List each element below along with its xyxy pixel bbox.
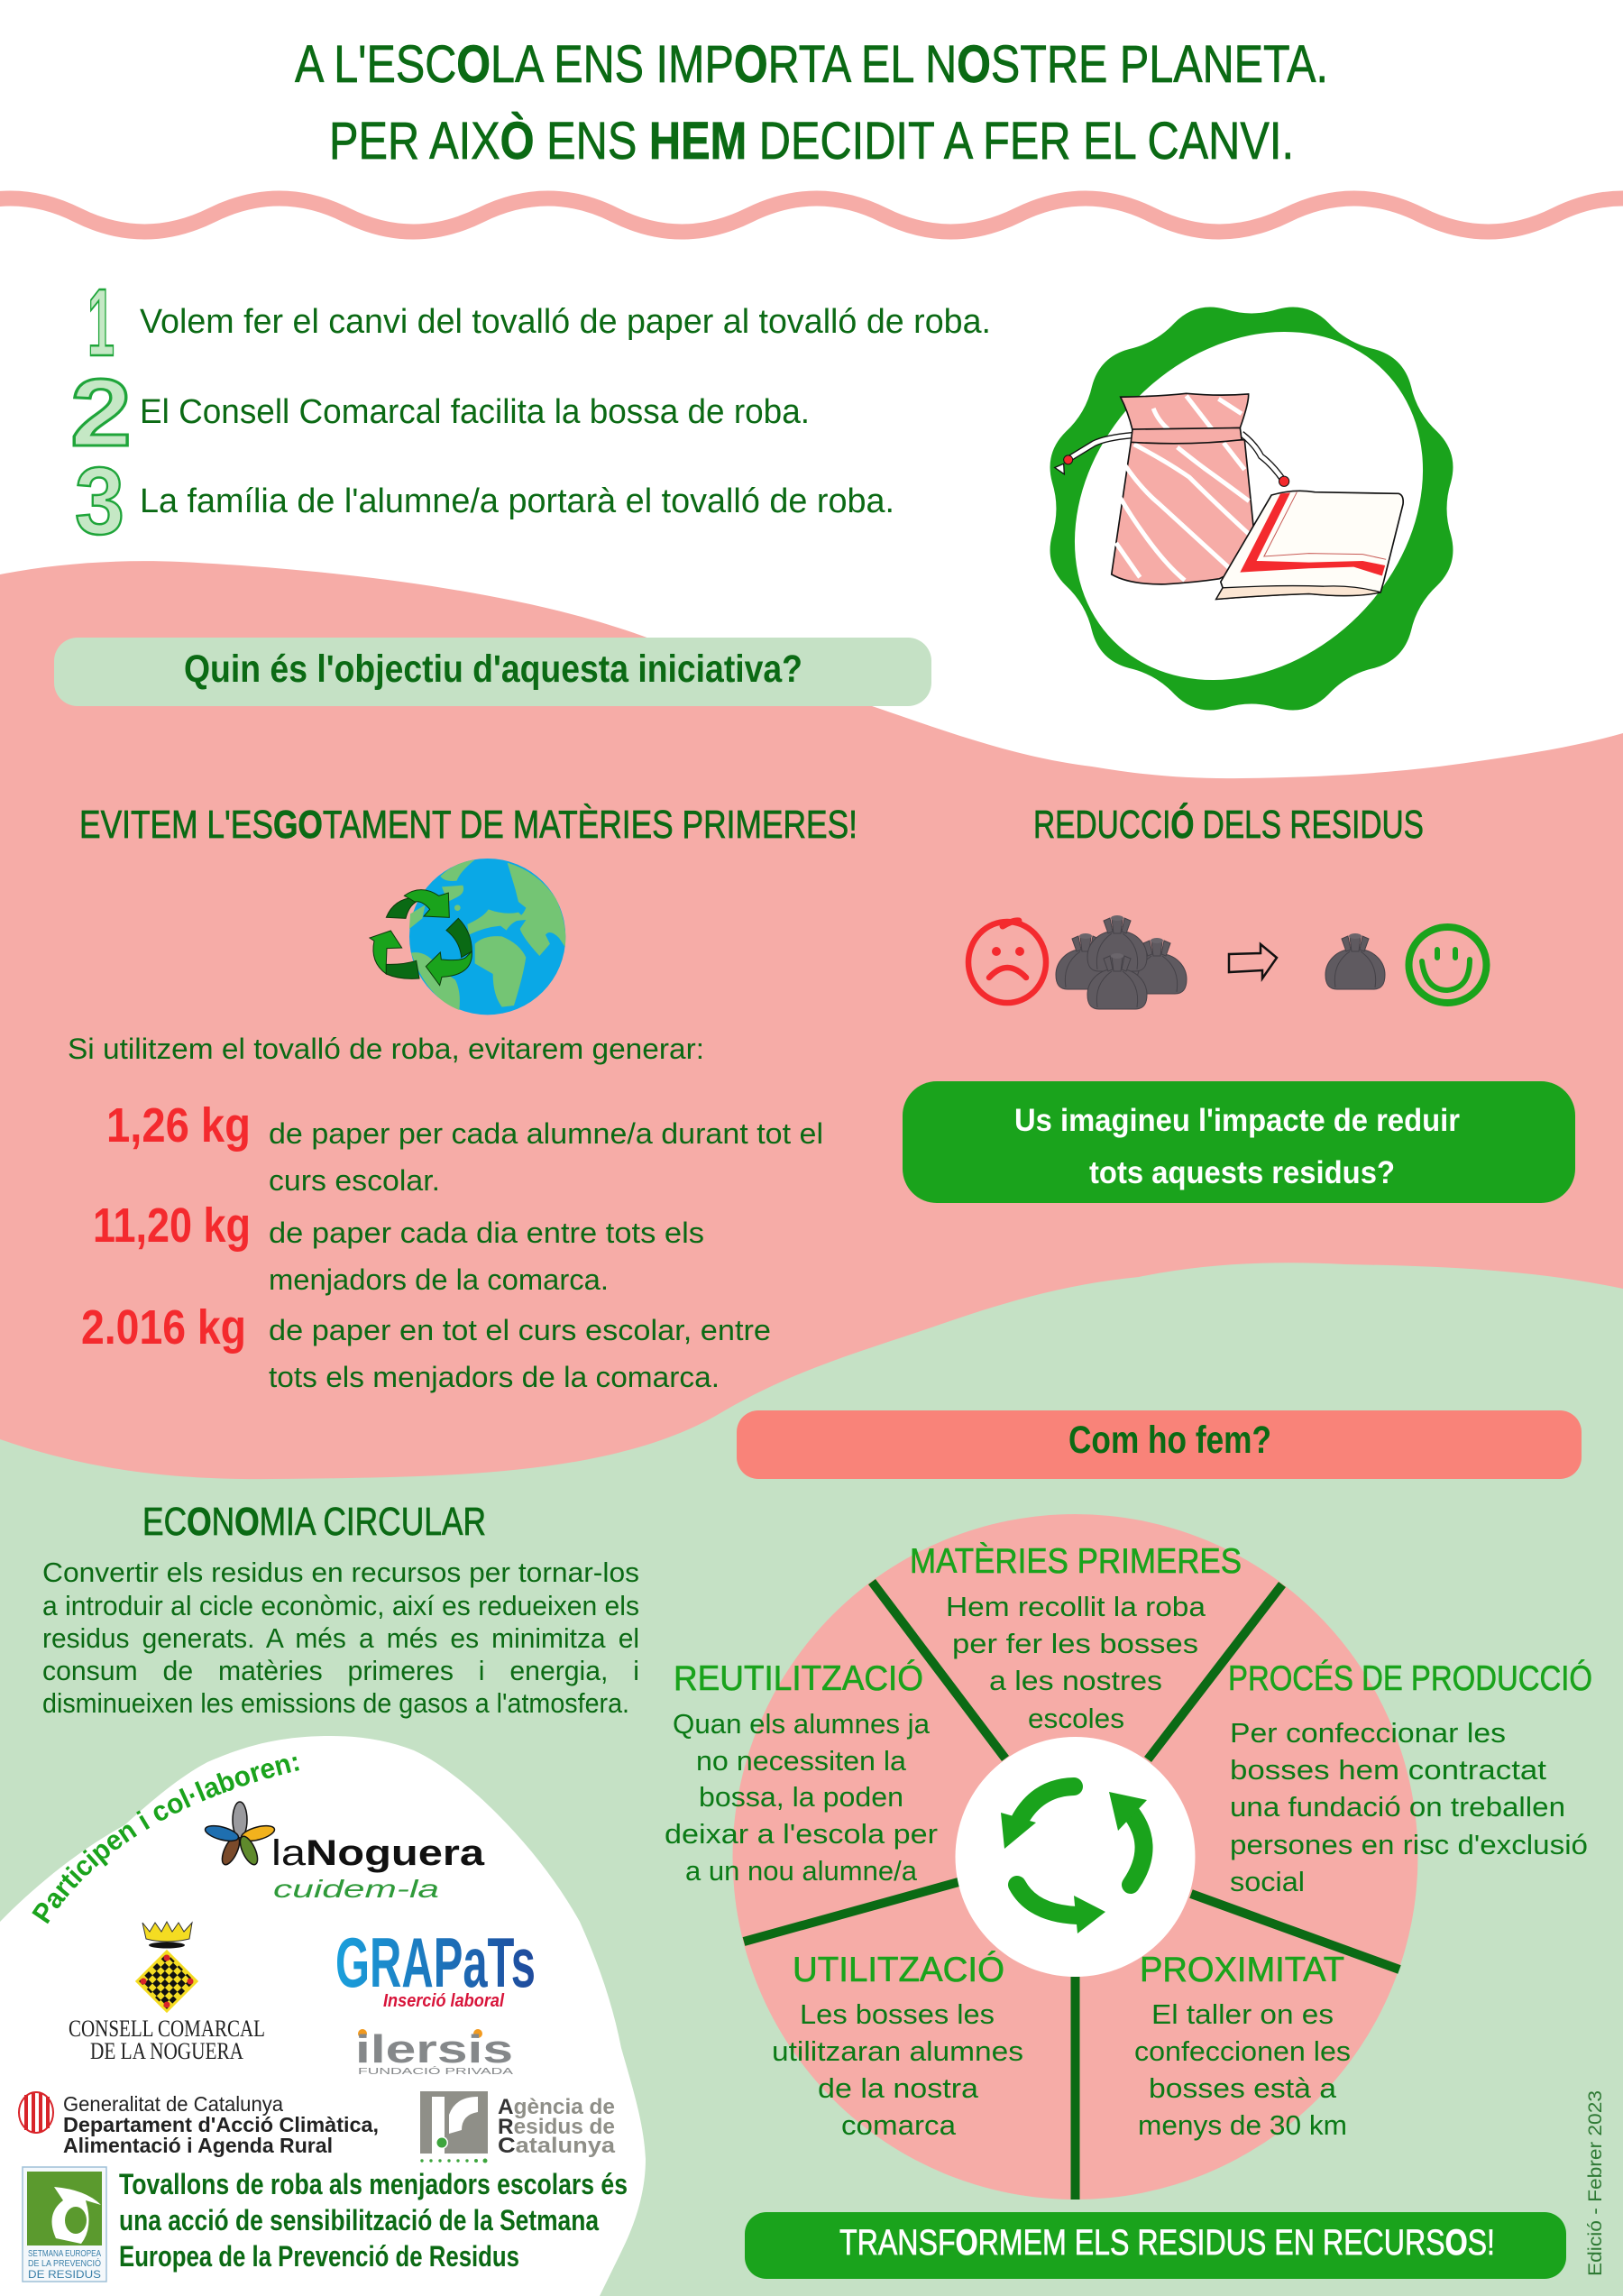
panel: waste reduction bbox=[903, 802, 1575, 1203]
closing statement bbox=[119, 2168, 628, 2273]
icon: scalloped green ring with bag and towel bbox=[1004, 261, 1494, 751]
segment: proximity bbox=[1134, 1951, 1351, 2141]
step 2 text: El Consell Comarcal facilita la bossa de roba. bbox=[140, 393, 810, 431]
logo: European Week for Waste Reduction: DE RESIDUS bbox=[28, 2268, 101, 2281]
paragraph: consum de matèries primeres i energia, i bbox=[42, 1655, 639, 1686]
background: white logo blob bbox=[0, 1736, 646, 2296]
stat: 1,26 kg: 1,26 kg bbox=[106, 1098, 251, 1153]
logo: Consell Comarcal bbox=[69, 1922, 265, 2064]
heading: REDUCCIÓ DELS RESIDUS bbox=[1033, 802, 1424, 847]
closing statement: Europea de la Prevenció de Residus bbox=[119, 2240, 519, 2273]
logo: European Week for Waste Reduction: DE LA PREVENCIÓ bbox=[28, 2257, 101, 2269]
paragraph bbox=[42, 1557, 639, 1719]
icon: sad face bbox=[968, 921, 1046, 1003]
logo: Ilersis: ilersis bbox=[355, 2027, 513, 2071]
icon: single garbage bag bbox=[1325, 933, 1385, 989]
icon: many garbage bags bbox=[1056, 915, 1187, 1009]
logo: Ilersis bbox=[355, 2027, 514, 2077]
logo: la Noguera bbox=[204, 1802, 485, 1903]
segment: raw materials: per fer les bosses bbox=[952, 1628, 1198, 1659]
stat: 11,20 kg bbox=[93, 1199, 704, 1296]
scalloped ring bbox=[1050, 308, 1453, 710]
stat: 2.016 kg: tots els menjadors de la comarca. bbox=[269, 1361, 720, 1393]
heading pill: how we do it: Com ho fem? bbox=[1068, 1419, 1271, 1462]
stat: 2.016 kg: de paper en tot el curs escolar, entre bbox=[269, 1314, 771, 1346]
logo: Grapats: GRAPaTs bbox=[335, 1923, 536, 2002]
segment: proximity: confeccionen les bbox=[1134, 2035, 1351, 2067]
callout: imagine the impact: tots aquests residus? bbox=[1089, 1155, 1395, 1190]
segment: raw materials: MATÈRIES PRIMERES bbox=[910, 1542, 1242, 1581]
segment: production process: persones en risc d'exclusió bbox=[1230, 1829, 1588, 1860]
segment: production process: social bbox=[1230, 1866, 1305, 1897]
icon: globe with recycling arrows bbox=[370, 859, 565, 1015]
logo: European Week for Waste Reduction: SETMANA EUROPEA bbox=[28, 2249, 101, 2259]
logo: Agència de Residus de Catalunya: Catalunya bbox=[498, 2134, 616, 2158]
logo: European Week for Waste Reduction bbox=[23, 2167, 106, 2282]
stat: 1,26 kg bbox=[106, 1098, 823, 1197]
segment: production process: Per confeccionar les bbox=[1230, 1717, 1506, 1749]
banner: transform waste into resources: TRANSFORMEM ELS RESIDUS EN RECURSOS! bbox=[839, 2223, 1495, 2263]
logo: Grapats: Inserció laboral bbox=[383, 1991, 504, 2011]
callout: imagine the impact bbox=[903, 1081, 1575, 1203]
segment: raw materials: a les nostres bbox=[989, 1665, 1162, 1696]
background: light green wave band bbox=[0, 1263, 1623, 2296]
panel: raw materials bbox=[68, 803, 857, 1393]
title bbox=[295, 35, 1328, 170]
segment: proximity: bosses està a bbox=[1149, 2072, 1337, 2104]
paragraph: a introduir al cicle econòmic, així es redueixen els bbox=[42, 1590, 639, 1621]
edition note: Edició - Febrer 2023 bbox=[1585, 2090, 1606, 2276]
numeral 1: 1 bbox=[87, 270, 115, 376]
step 1 text: Volem fer el canvi del tovalló de paper al tovalló de roba. bbox=[140, 303, 991, 341]
closing statement: Tovallons de roba als menjadors escolars és bbox=[119, 2168, 628, 2200]
segment: use: de la nostra bbox=[818, 2072, 979, 2104]
step 3 text: La família de l'alumne/a portarà el tovalló de roba. bbox=[140, 482, 894, 520]
segment: raw materials: escoles bbox=[1028, 1703, 1124, 1734]
paragraph: residus generats. A més a més es minimitza el bbox=[42, 1622, 639, 1654]
title line 2: PER AIXÒ ENS HEM DECIDIT A FER EL CANVI. bbox=[329, 112, 1294, 170]
logo: Consell Comarcal: DE LA NOGUERA bbox=[90, 2038, 243, 2064]
heading: ECONOMIA CIRCULAR bbox=[142, 1500, 486, 1544]
stat: 2.016 kg bbox=[81, 1300, 771, 1393]
segment: proximity: PROXIMITAT bbox=[1140, 1951, 1344, 1989]
paragraph: disminueixen les emissions de gasos a l'atmosfera. bbox=[42, 1687, 629, 1719]
segment: raw materials bbox=[910, 1542, 1242, 1734]
heading pill: how we do it bbox=[737, 1410, 1582, 1479]
icon: cycle arrows bbox=[1001, 1786, 1147, 1933]
logo: Consell Comarcal: CONSELL COMARCAL bbox=[69, 2016, 265, 2042]
curved heading: Participen i col·laboren: bbox=[32, 1757, 299, 1924]
segment: proximity: El taller on es bbox=[1151, 1998, 1334, 2030]
stat: 1,26 kg: curs escolar. bbox=[269, 1164, 440, 1197]
segment: use: utilitzaran alumnes bbox=[772, 2035, 1023, 2067]
segment: reuse: deixar a l'escola per bbox=[665, 1818, 938, 1850]
pill background bbox=[54, 638, 931, 706]
logo: Agència de Residus de Catalunya: Agència de bbox=[498, 2095, 615, 2119]
background: pink wave band bbox=[0, 561, 1623, 1533]
icon: arrow bbox=[1229, 944, 1277, 978]
stat: 11,20 kg: 11,20 kg bbox=[93, 1199, 251, 1253]
panel: collaborators logos bbox=[18, 1757, 628, 2282]
segment: reuse: bossa, la poden bbox=[699, 1781, 903, 1813]
wheel hub bbox=[956, 1737, 1196, 1977]
stat: 2.016 kg: 2.016 kg bbox=[81, 1300, 246, 1355]
numeral 3: 3 bbox=[75, 448, 124, 555]
numeral 2: 2 bbox=[70, 360, 132, 466]
panel: circular economy bbox=[42, 1500, 639, 1719]
ring inner white disc bbox=[1004, 261, 1494, 751]
paragraph: Convertir els residus en recursos per tornar-los bbox=[42, 1557, 639, 1588]
logo: Ilersis: FUNDACIÓ PRIVADA bbox=[358, 2065, 514, 2077]
steps list bbox=[70, 270, 991, 555]
segment: reuse bbox=[665, 1659, 938, 1887]
chart: circular process wheel bbox=[665, 1514, 1592, 2200]
segment: production process bbox=[1228, 1659, 1592, 1897]
icon: happy face bbox=[1408, 927, 1486, 1003]
decorative pink wavy divider bbox=[0, 198, 1623, 232]
segment: use bbox=[772, 1951, 1023, 2141]
heading pill: objective bbox=[54, 638, 931, 706]
logo: Generalitat de Catalunya: Departament d'Acció Climàtica, bbox=[63, 2113, 379, 2136]
banner: transform waste into resources bbox=[745, 2212, 1566, 2279]
segment: reuse: no necessiten la bbox=[696, 1745, 907, 1777]
logo: Grapats bbox=[335, 1923, 536, 2011]
heading: EVITEM L'ESGOTAMENT DE MATÈRIES PRIMERES! bbox=[79, 803, 857, 847]
segment: use: comarca bbox=[841, 2109, 957, 2141]
logo: Generalitat de Catalunya: Alimentació i Agenda Rural bbox=[63, 2134, 333, 2157]
folded towel bbox=[1216, 491, 1403, 599]
stat: 11,20 kg: de paper cada dia entre tots els bbox=[269, 1217, 704, 1249]
segment: reuse: Quan els alumnes ja bbox=[673, 1708, 931, 1740]
segment: reuse: a un nou alumne/a bbox=[685, 1855, 918, 1887]
cloth bag bbox=[1055, 393, 1403, 599]
logo: Agència de Residus de Catalunya bbox=[420, 2091, 616, 2163]
logo: Generalitat de Catalunya bbox=[19, 2092, 379, 2157]
segment: reuse: REUTILITZACIÓ bbox=[674, 1659, 923, 1698]
wheel spokes bbox=[744, 1582, 1399, 2200]
logo: Agència de Residus de Catalunya: Residus de bbox=[498, 2115, 615, 2139]
wheel disc bbox=[732, 1514, 1417, 2200]
logo: la Noguera: laNoguera bbox=[271, 1833, 485, 1873]
segment: use: Les bosses les bbox=[800, 1998, 995, 2030]
segment: production process: una fundació on treballen bbox=[1230, 1791, 1565, 1823]
intro sentence: Si utilitzem el tovalló de roba, evitarem generar: bbox=[68, 1033, 704, 1065]
segment: raw materials: Hem recollit la roba bbox=[946, 1591, 1206, 1622]
segment: proximity: menys de 30 km bbox=[1138, 2109, 1347, 2141]
segment: use: UTILITZACIÓ bbox=[793, 1951, 1004, 1989]
logo: la Noguera: cuidem-la bbox=[273, 1875, 439, 1903]
stat: 11,20 kg: menjadors de la comarca. bbox=[269, 1263, 609, 1296]
closing statement: una acció de sensibilització de la Setmana bbox=[119, 2204, 599, 2236]
logo: Generalitat de Catalunya: Generalitat de Catalunya bbox=[63, 2092, 283, 2116]
segment: production process: bosses hem contractat bbox=[1230, 1754, 1546, 1786]
title line 1: A L'ESCOLA ENS IMPORTA EL NOSTRE PLANETA. bbox=[295, 35, 1328, 94]
stat: 1,26 kg: de paper per cada alumne/a durant tot el bbox=[269, 1117, 823, 1150]
pill text: Quin és l'objectiu d'aquesta iniciativa? bbox=[184, 647, 802, 691]
callout: imagine the impact: Us imagineu l'impacte de reduir bbox=[1014, 1103, 1460, 1138]
